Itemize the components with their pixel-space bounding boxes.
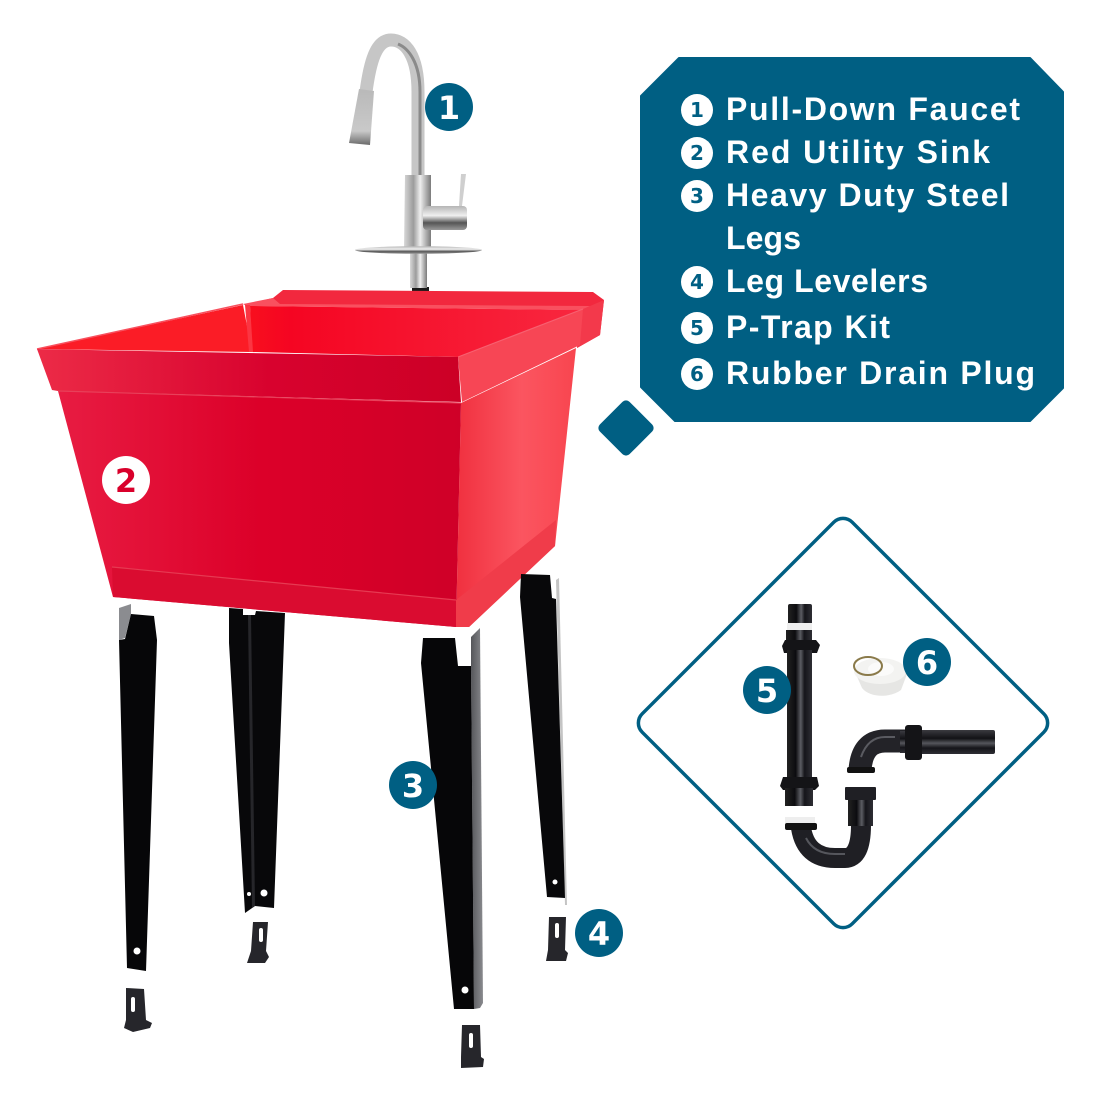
badge 3: 3 (402, 767, 424, 805)
band top line (112, 567, 456, 600)
elbow arm (847, 725, 995, 773)
gooseneck spout (366, 40, 418, 178)
small diamond accent (596, 398, 656, 458)
badge 5: 5 (756, 672, 778, 710)
leveler foot 4 (546, 917, 568, 961)
badge 4 (575, 909, 623, 957)
back ledge (243, 290, 604, 348)
legend item 3: Legs (726, 220, 801, 256)
red utility sink (37, 290, 604, 627)
legend item 3 (681, 177, 1009, 256)
panel background (641, 58, 1063, 421)
badge 6: 6 (916, 644, 938, 682)
right rim bright line (458, 309, 583, 357)
legend panel (641, 58, 1063, 421)
legend item 6: Rubber Drain Plug (726, 355, 1035, 391)
legend item 4: 4 (690, 270, 704, 294)
faucet body (404, 175, 431, 247)
legend item 3: Heavy Duty Steel (726, 177, 1009, 213)
rim under-line (58, 391, 461, 403)
faucet lever (459, 174, 466, 206)
left rim highlight (37, 304, 243, 349)
pull-down head (349, 89, 374, 145)
heavy duty steel legs (119, 574, 567, 1009)
legend item 5: P-Trap Kit (726, 309, 890, 345)
front left leg (119, 604, 157, 971)
legend item 6: 6 (690, 362, 704, 386)
legend item 3: 3 (690, 184, 704, 208)
badge 2 (102, 456, 150, 504)
badge 1: 1 (438, 89, 460, 127)
legend item 5: 5 (690, 316, 704, 340)
ledge light line (243, 298, 590, 310)
leveler foot 3 (461, 1025, 484, 1068)
basin back wall (250, 306, 582, 357)
right body side (456, 348, 576, 627)
faucet (349, 40, 482, 305)
leg levelers (124, 917, 568, 1068)
back right leg (520, 574, 567, 905)
legend item 1: 1 (690, 98, 704, 122)
badge 1 (425, 83, 473, 131)
front right leg (421, 628, 483, 1009)
legend item 4: Leg Levelers (726, 263, 928, 299)
faucet handle cylinder (423, 206, 467, 230)
right rim (458, 309, 583, 402)
basin corner fold (245, 305, 253, 352)
legend item 2: Red Utility Sink (726, 134, 990, 170)
badge 3 (389, 761, 437, 809)
right bottom band (456, 520, 556, 627)
j-bend trap (785, 787, 876, 858)
bottom band (112, 567, 456, 627)
spout shading (398, 44, 420, 178)
legend item 2: 2 (690, 141, 704, 165)
badge 4: 4 (588, 915, 610, 953)
legend item 1: Pull-Down Faucet (726, 91, 1020, 127)
front rim (37, 349, 461, 402)
badge 5 (743, 666, 791, 714)
hose below deck plate (412, 287, 429, 305)
rubber drain plug (854, 657, 907, 696)
badge 6 (903, 638, 951, 686)
deck plate (355, 246, 482, 254)
faucet shank (410, 253, 427, 288)
basin left wall (37, 305, 252, 352)
front body (58, 391, 461, 627)
right flange shading (577, 300, 604, 348)
p-trap kit (780, 604, 995, 858)
diamond frame for p-trap kit (633, 513, 1053, 933)
back left leg (229, 608, 285, 913)
leveler foot 1 (124, 988, 152, 1032)
vertical tailpiece (780, 604, 820, 806)
badge 2: 2 (115, 462, 137, 500)
leveler foot 2 (247, 922, 269, 963)
